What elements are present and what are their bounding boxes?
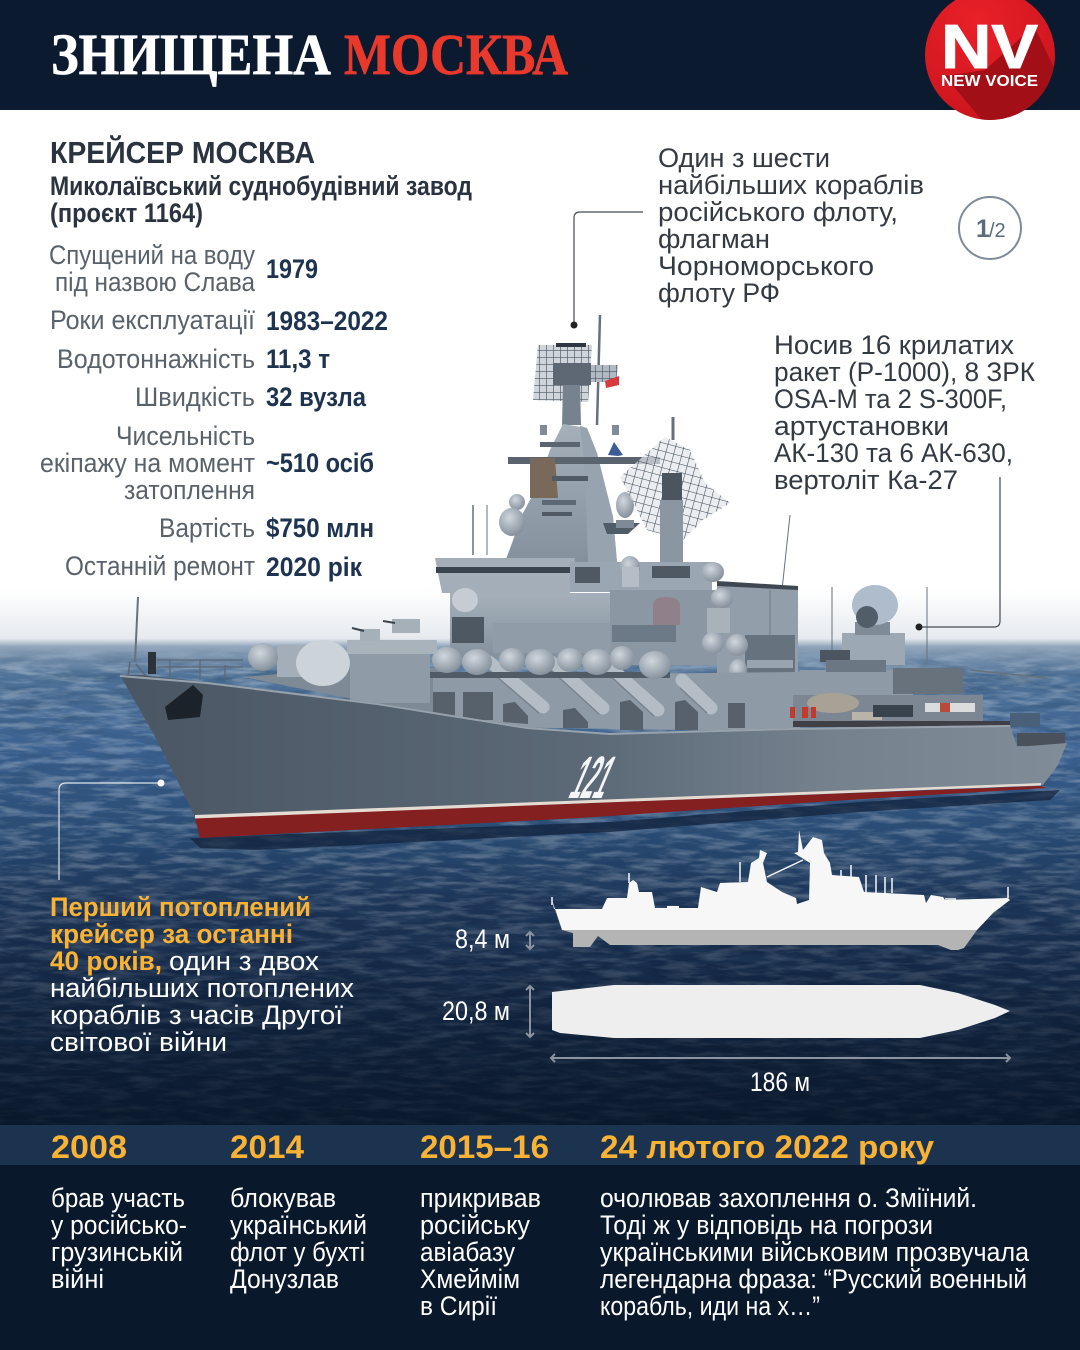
rear tower and lattice radar [620, 437, 730, 565]
page counter 1/2: 1 [976, 215, 990, 243]
hull [120, 675, 1067, 817]
timeline text: 24 February 2022: очолював захоплення о. Зміїний. [600, 1183, 977, 1213]
title: МОСКВА [344, 22, 568, 87]
timeline text: 24 February 2022 [600, 1183, 1030, 1321]
arrow: beam [526, 986, 534, 1037]
timeline text: 2015-16: в Сирії [420, 1291, 497, 1321]
timeline text: 2008: грузинській [51, 1237, 183, 1267]
specs table: Чисельність [116, 421, 255, 451]
timeline text: 2008 [51, 1183, 187, 1294]
heading: cruiser name: (проєкт 1164) [50, 198, 203, 228]
anchor recess [165, 685, 203, 720]
header bar [0, 0, 1080, 110]
forward gun deck and turrets [128, 619, 440, 722]
specs table: 1979 [266, 254, 318, 284]
text block: flagship note: найбільших кораблів [658, 170, 924, 200]
specs table: Останній ремонт [65, 551, 255, 581]
deck edge highlight [120, 676, 1010, 734]
text block: first sunk cruiser: найбільших потоплених [50, 973, 355, 1003]
callout line: flagship [570, 212, 643, 328]
specs table: 11,3 т [266, 344, 330, 374]
specs table: під назвою Слава [55, 267, 256, 297]
heading: cruiser name [50, 134, 472, 228]
timeline text: 2014: блокував [230, 1183, 336, 1213]
timeline text: 2008: у російсько- [51, 1210, 187, 1240]
red boot-top [195, 786, 1047, 838]
timeline text: 2014: український [230, 1210, 367, 1240]
specs table: Роки експлуатації [50, 305, 255, 335]
specs table: Швидкість [135, 382, 255, 412]
specs table: ~510 осіб [266, 448, 374, 478]
text block: armament [774, 330, 1035, 495]
specs table: Водотоннажність [57, 344, 255, 374]
aft radar dome and block [790, 585, 1065, 746]
timeline band: 24 лютого 2022 року [600, 1129, 934, 1165]
text block: armament: OSA-M та 2 S-300F, [774, 384, 1007, 414]
text block: flagship note: російського флоту, [658, 197, 898, 227]
funnel block [702, 581, 798, 730]
heading: cruiser name: КРЕЙСЕР МОСКВА [50, 134, 315, 170]
specs table: 1983–2022 [266, 306, 388, 336]
text block: armament: артустановки [774, 411, 949, 441]
specs table: $750 млн [266, 513, 374, 543]
specs table: затоплення [124, 475, 255, 505]
bottom dark panel [0, 1125, 1080, 1350]
text block: flagship note [658, 143, 924, 308]
hull shadow on water [190, 790, 1060, 850]
logo: NV New Voice: NV [941, 13, 1038, 82]
timeline text: 24 February 2022: Тоді ж у відповідь на погрози [600, 1210, 933, 1240]
dimension labels: 186 м [750, 1067, 810, 1097]
text block: armament: АК-130 та 6 АК-630, [774, 438, 1013, 468]
timeline band: 2008 [51, 1129, 127, 1165]
page counter 1/2: /2 [989, 220, 1006, 242]
timeline text: 24 February 2022: легендарна фраза: “Русский военный [600, 1264, 1027, 1294]
waterline stripe [195, 783, 1041, 818]
text block: flagship note: флоту РФ [658, 278, 780, 308]
text block: first sunk cruiser [50, 892, 355, 1057]
text block: armament: Носив 16 крилатих [774, 330, 1015, 360]
timeline text: 2015-16: російську [420, 1210, 530, 1240]
timeline text: 24 February 2022: корабль, иди на х…” [600, 1291, 820, 1321]
callout line: sunk note [59, 780, 164, 880]
timeline text: 2008: війні [51, 1264, 104, 1294]
timeline band: 2015–16 [420, 1129, 549, 1165]
main tower [499, 385, 660, 562]
thin masts and antennas [135, 315, 1047, 678]
text block: first sunk cruiser: 40 років, [50, 946, 162, 976]
title [51, 22, 568, 87]
timeline band [0, 1125, 1080, 1165]
timeline band: 2014 [230, 1129, 304, 1165]
timeline text: 2014 [230, 1183, 367, 1294]
title: ЗНИЩЕНА [51, 22, 331, 87]
callout line: armament [916, 477, 1000, 630]
bridge and midship blocks [435, 556, 724, 665]
page counter 1/2 [959, 197, 1021, 259]
text block: first sunk cruiser: кораблів з часів Другої [50, 1000, 344, 1030]
radar lattice on main mast [533, 343, 618, 402]
logo: NV New Voice [925, 0, 1055, 120]
text block: armament: вертоліт Ка-27 [774, 465, 958, 495]
ship illustration: cruiser Moskva [120, 315, 1067, 850]
text block: armament: ракет (Р-1000), 8 ЗРК [774, 357, 1035, 387]
specs table: Вартість [159, 513, 255, 543]
arrow: length [551, 1054, 1010, 1062]
silhouette: top view [552, 985, 1010, 1038]
specs table: Спущений на воду [49, 240, 255, 270]
text block: flagship note: флагман [658, 224, 770, 254]
timeline text: 2014: флот у бухті [230, 1237, 365, 1267]
timeline text: 2015-16: прикривав [420, 1183, 541, 1213]
sea background [0, 590, 1080, 1130]
text block: first sunk cruiser: крейсер за останні [50, 919, 293, 949]
timeline text: 2008: брав участь [51, 1183, 185, 1213]
logo: NV New Voice: NEW VOICE [941, 73, 1038, 90]
specs table: екіпажу на момент [40, 448, 255, 478]
dimension labels: 20,8 м [442, 996, 510, 1026]
silhouette: side view [552, 830, 1010, 950]
text block: first sunk cruiser: світової війни [50, 1027, 227, 1057]
text block: first sunk cruiser: один з двох [169, 946, 320, 976]
dimension labels [442, 924, 810, 1097]
text block: flagship note: Чорноморського [658, 251, 874, 281]
missile launcher battery [430, 646, 800, 732]
heading: cruiser name: Миколаївський суднобудівний завод [50, 171, 472, 201]
text block: first sunk cruiser: Перший потоплений [50, 892, 311, 922]
ship illustration: cruiser Moskva: 121 [561, 744, 625, 811]
arrow: draught [526, 932, 534, 949]
flag [605, 376, 619, 388]
text block: flagship note: Один з шести [658, 143, 830, 173]
timeline text: 2015-16 [420, 1183, 541, 1321]
timeline text: 2015-16: Хмеймім [420, 1264, 520, 1294]
timeline text: 2015-16: авіабазу [420, 1237, 515, 1267]
specs table: 2020 рік [266, 552, 362, 582]
specs table: 32 вузла [266, 382, 367, 412]
timeline text: 2014: Донузлав [230, 1264, 339, 1294]
timeline text: 24 February 2022: українськими військовим прозвучала [600, 1237, 1030, 1267]
specs table [40, 240, 388, 582]
dimension labels: 8,4 м [455, 924, 510, 954]
